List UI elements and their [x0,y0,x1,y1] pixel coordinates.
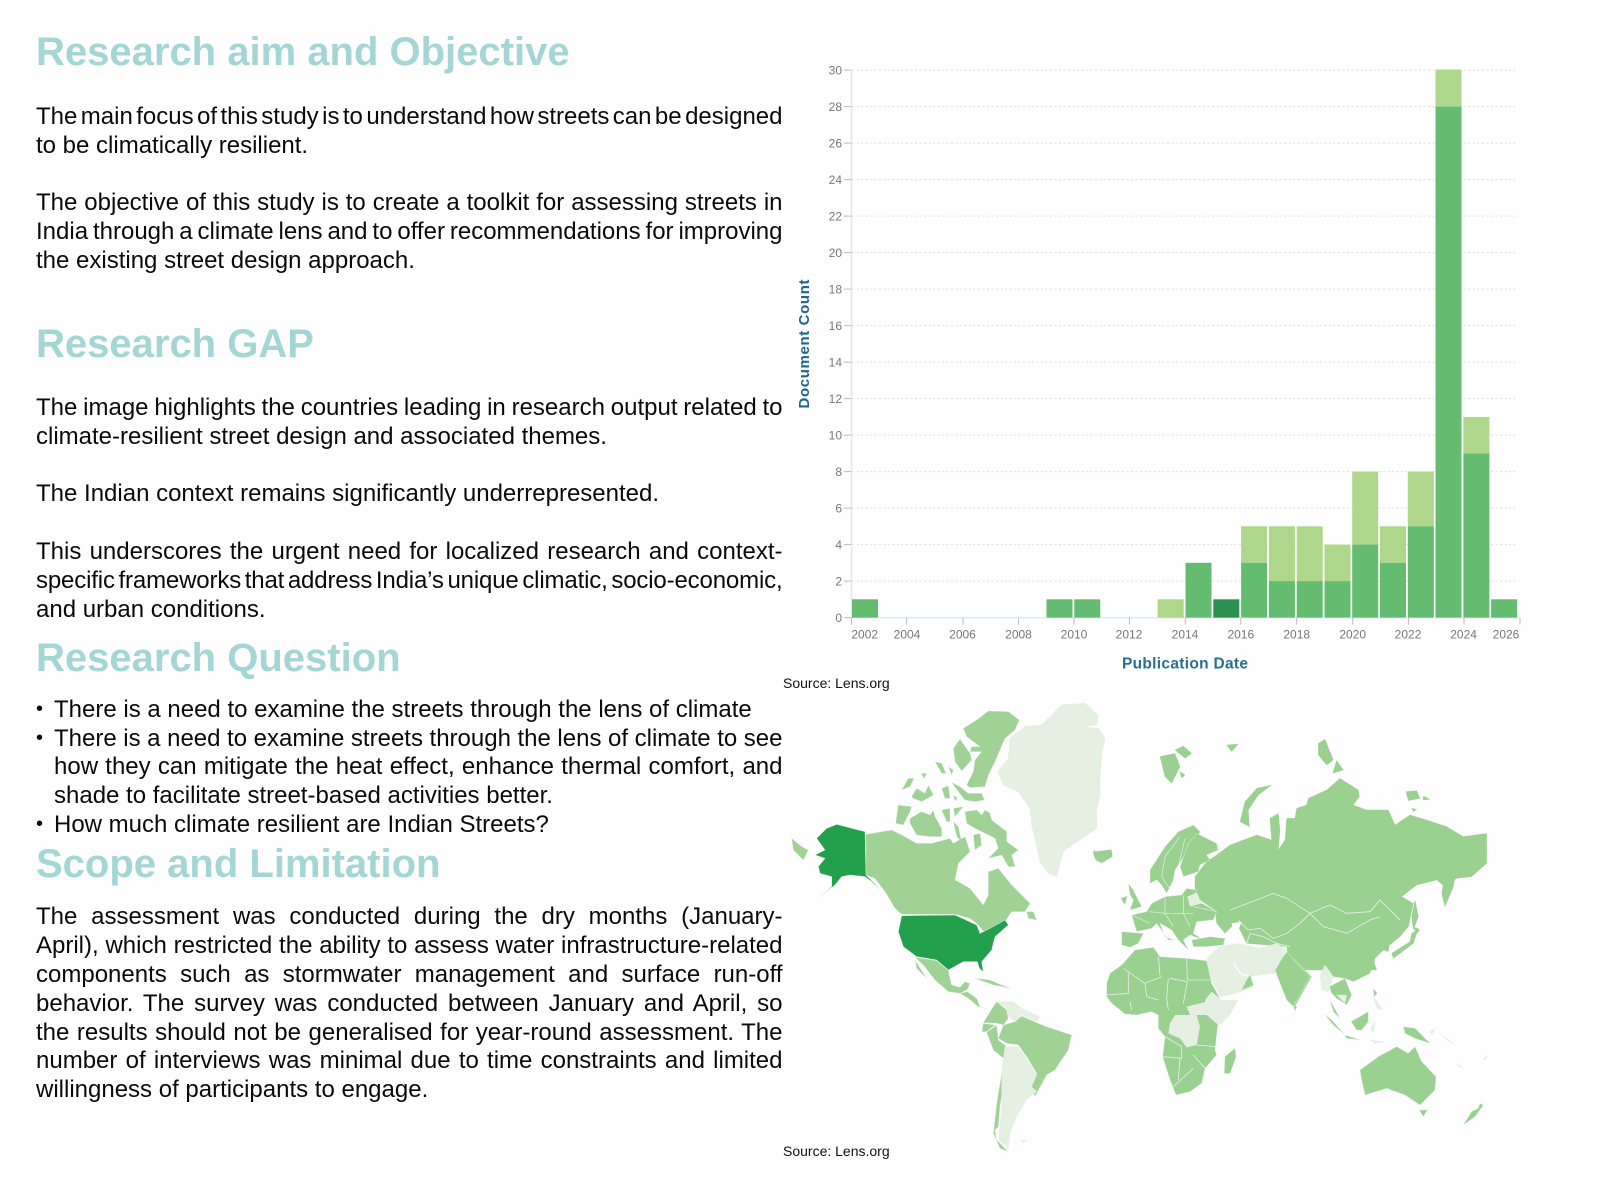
united states [898,915,1008,972]
south america medium countries [982,1002,1072,1152]
y axis title: Document Count [796,280,813,408]
x axis labels: 2004 [894,628,921,642]
middle east [1207,943,1287,997]
bars: light series [1158,70,1489,618]
caspian sea [1232,922,1243,943]
x axis labels: 2012 [1116,628,1143,642]
bullet list: research questions: shade to facilitate street-based activities better. [54,782,553,809]
source note: chart: Source: Lens.org [783,675,890,691]
text block: leading countries: climate-resilient street design and associated themes. [36,423,607,450]
alaska [815,824,885,897]
southeast asia and oceania [1293,940,1488,1125]
text block: objective: India through a climate lens and to offer recommendations for improving [36,218,782,245]
text block: main focus: to be climatically resilient. [36,132,308,159]
russia, central asia, china, arctic islands [1160,739,1487,970]
red sea and gulf gap [1233,963,1250,975]
y axis labels [829,63,842,625]
y axis labels: 6 [835,501,842,515]
text block: main focus: The main focus of this study is to understand how streets can be designed [36,103,782,130]
text block: scope and limitation: willingness of participants to engage. [36,1076,428,1103]
source note: map: Source: Lens.org [783,1143,890,1159]
x axis labels: 2016 [1227,628,1254,642]
canada and arctic islands [792,711,1105,933]
bullet list: research questions: • [36,727,43,749]
text block: objective [36,189,782,274]
text block: leading countries: The image highlights the countries leading in research output related to [36,394,782,421]
y axis labels: 0 [835,611,842,625]
europe countries [1093,825,1312,1007]
y axis labels: 28 [829,100,842,114]
text block: scope and limitation: components such as stormwater management and surface run-off [36,961,782,988]
x axis labels: 2008 [1005,628,1032,642]
bar: dark series [1213,599,1239,618]
north america and arctic [792,703,1105,933]
americas south of canada [898,915,1072,1152]
south america low countries [997,1002,1040,1148]
y axis labels: 22 [829,209,842,223]
text block: main focus [36,103,782,159]
india [1275,952,1310,1007]
text block: scope and limitation [36,903,783,1103]
y axis labels: 14 [829,355,842,369]
bullet list: research questions [36,696,782,838]
x axis labels: 2002 [851,628,878,642]
y axis labels: 4 [835,538,842,552]
africa [1107,947,1310,1095]
text block: scope and limitation: April), which restricted the ability to assess water infrastructure-related [36,932,782,959]
y axis labels: 16 [829,319,842,333]
low output southeast asia [1320,965,1488,1068]
china south [1295,940,1375,982]
x axis labels: 2006 [949,628,976,642]
text block: scope and limitation: behavior. The survey was conducted between January and April, so [36,990,782,1017]
x axis labels: 2010 [1061,628,1088,642]
y axis labels: 18 [829,282,842,296]
y axis labels: 12 [829,392,842,406]
x axis labels [851,628,1520,642]
islands and australia [1293,978,1483,1125]
text block: scope and limitation: The assessment was conducted during the dry months (January- [36,903,782,930]
bars: medium series [852,107,1517,618]
bullet list: research questions: • [36,698,43,720]
text block: urgent need: This underscores the urgent need for localized research and context- [36,538,782,565]
text block: indian context: The Indian context remains significantly underrepresented. [36,480,659,507]
y axis labels: 10 [829,428,842,442]
heading: scope and limitation: Scope and Limitation [36,842,440,886]
x axis labels: 2022 [1395,628,1422,642]
heading: research aim and objective: Research aim and Objective [36,30,570,74]
y axis labels: 20 [829,246,842,260]
europe and middle east [1093,825,1312,1007]
borders: kazakhstan and mongolia [1230,893,1400,947]
bullet list: research questions: There is a need to examine the streets through the lens of climate [54,696,752,723]
x axis labels: 2020 [1339,628,1366,642]
text block: scope and limitation: number of interviews was minimal due to time constraints and limited [36,1047,782,1074]
text block: urgent need: and urban conditions. [36,596,266,623]
bullet list: research questions: • [36,813,43,835]
y axis labels: 8 [835,465,842,479]
text block: leading countries [36,394,782,450]
bullet list: research questions: There is a need to examine streets through the lens of climate to see [54,725,782,752]
text block: objective: The objective of this study is to create a toolkit for assessing streets in [36,189,782,216]
y axis labels: 24 [829,173,842,187]
low output african countries [1168,992,1238,1047]
x axis labels: 2014 [1172,628,1199,642]
greenland [998,703,1105,877]
x axis labels: 2018 [1283,628,1310,642]
madagascar [1224,1048,1236,1073]
x axis labels: 2024 [1450,628,1477,642]
x axis labels: 2026 [1493,628,1520,642]
eurasia [1160,739,1487,970]
oman [1242,975,1253,990]
europe internal borders [1132,837,1217,927]
mexico and central america [915,957,1012,1009]
text block: objective: the existing street design approach. [36,247,415,274]
belarus [1187,893,1202,907]
africa continent [1107,947,1222,1095]
text block: urgent need [36,538,782,623]
x axis title: Publication Date [1122,656,1248,672]
y axis labels: 26 [829,136,842,150]
text block: scope and limitation: the results should not be generalised for year-round assessment. The [36,1019,782,1046]
heading: research gap: Research GAP [36,322,314,366]
heading: research question: Research Question [36,636,401,680]
text block: urgent need: specific frameworks that address India’s unique climatic, socio-economic, [36,567,782,594]
y axis labels: 2 [835,574,842,588]
bullet list: research questions: How much climate resilient are Indian Streets? [54,811,549,838]
y axis labels: 30 [829,63,842,77]
african borders [1107,957,1217,1087]
bullet list: research questions: how they can mitigate the heat effect, enhance thermal comfort, and [54,753,782,780]
